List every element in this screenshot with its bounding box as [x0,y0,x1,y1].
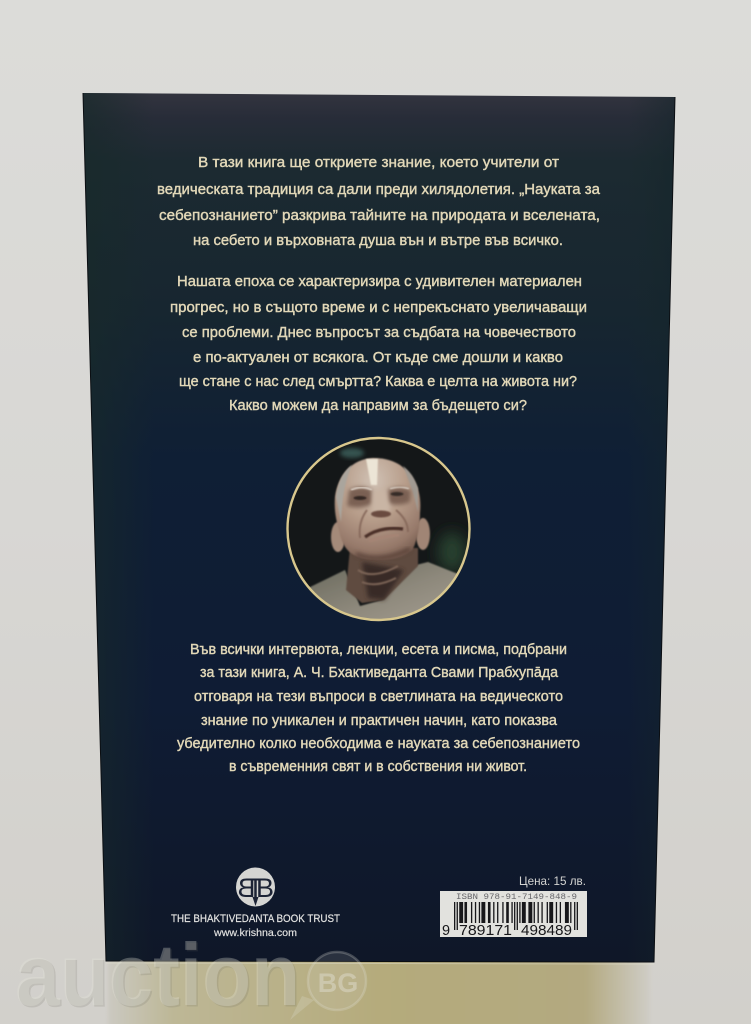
text block: third paragraph: Във всички интервюта, лекции, есета и писма, подбрани [190,642,567,658]
text block: first paragraph: на себето и върховната душа вън и вътре във всичко. [193,233,563,249]
text block: second paragraph: Какво можем да направим за бъдещето си? [229,398,527,414]
text block: first paragraph: ведическата традиция са дали преди хилядолетия. „Науката за [157,182,601,198]
text block: third paragraph: знание по уникален и практичен начин, като показва [201,713,558,729]
text block: second paragraph: прогрес, но в същото време и с непрекъснато увеличаващи [170,300,587,316]
icon: publisher logo: T [247,873,264,903]
text block: second paragraph [170,274,587,414]
text block: third paragraph: отговаря на тези въпроси в светлината на ведическото [194,689,563,705]
text block: second paragraph: Нашата епоха се характеризира с удивителен материален [177,274,582,290]
text block: third paragraph: за тази книга, А. Ч. Бхактиведанта Свами Прабхупāда [200,665,559,681]
background: table surface [108,958,650,1024]
text block: third paragraph [177,642,580,775]
portrait: medallion photo [288,438,470,622]
barcode: ISBN 978-91-7149-848-9 [456,893,577,902]
text block: third paragraph: в съвременния свят и в собствения ни живот. [229,759,527,775]
watermark: auction.bg: auction [15,925,300,1024]
publisher website: www.krishna.com [213,927,297,939]
barcode [440,891,587,939]
watermark: auction.bg: BG [318,968,358,998]
panel: book back cover [83,93,675,964]
icon: publisher logo [236,868,275,906]
text block: first paragraph: себепознанието” разкрива тайните на природата и вселената, [159,208,600,224]
text block: second paragraph: ще стане с нас след смъртта? Каква е целта на живота ни? [179,374,577,390]
text block: second paragraph: се проблеми. Днес въпросът за съдбата на човечеството [182,325,576,341]
watermark: auction.bg: auction [16,926,302,1024]
text block: second paragraph: е по-актуален от всякога. От къде сме дошли и какво [193,350,563,366]
barcode: 9 [442,923,450,939]
text block: first paragraph [157,155,601,249]
barcode: 498489 [521,923,572,939]
text block: third paragraph: убедително колко необходима е науката за себепознанието [177,736,580,752]
publisher name: THE BHAKTIVEDANTA BOOK TRUST [171,913,340,925]
price label: Цена: 15 лв. [519,874,586,888]
text block: first paragraph: В тази книга ще откриете знание, което учители от [198,155,559,171]
icon: publisher logo: B [237,873,256,903]
icon: publisher logo: B [256,873,274,903]
barcode: 789171 [459,923,512,939]
